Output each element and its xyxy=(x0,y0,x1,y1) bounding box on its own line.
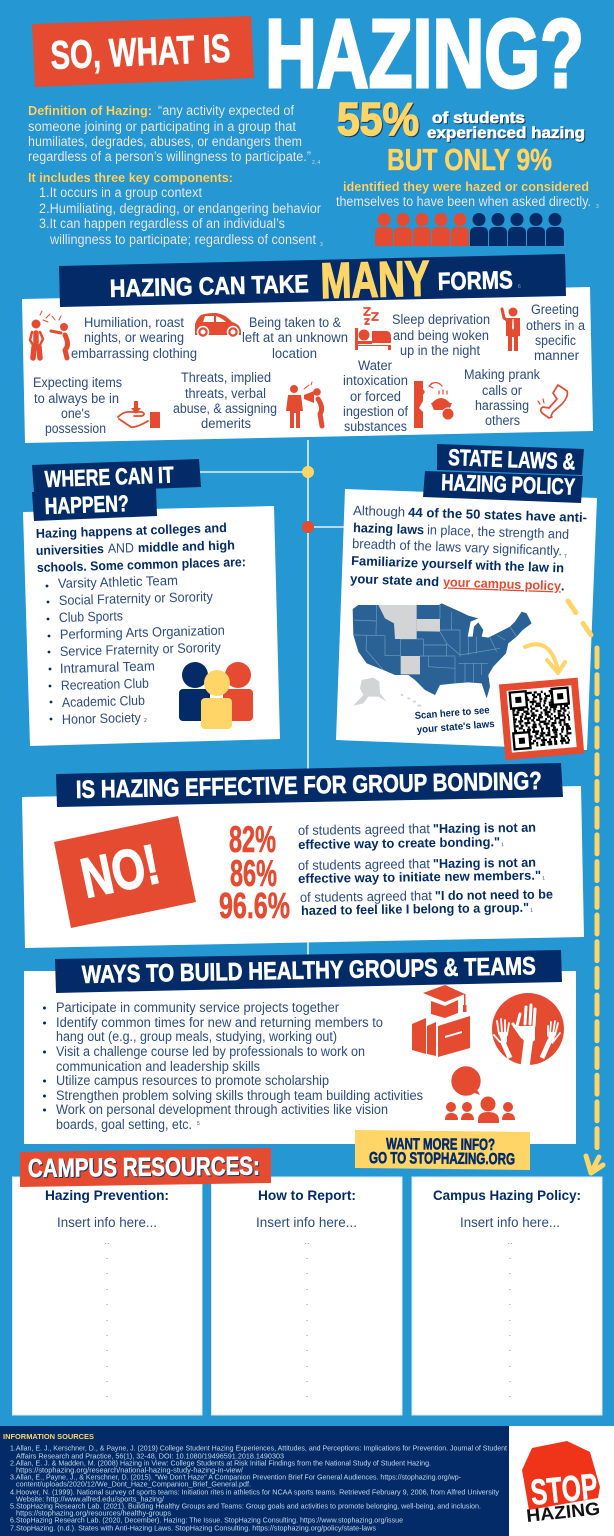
list of ways: Participate in community service projects together xyxy=(56,1000,339,1015)
panel: hazing prevention: .. xyxy=(104,1236,110,1246)
panel: how to report: . xyxy=(306,1266,308,1276)
icon: car xyxy=(195,313,241,338)
logo: stop hazing: HAZING xyxy=(525,1498,601,1526)
body text: state laws: Familiarize yourself with the law in xyxy=(351,553,564,575)
body text: state laws: your campus policy xyxy=(443,574,562,593)
intro text: middle and high xyxy=(138,537,235,555)
banner heading: hazing can take many forms: 6 xyxy=(518,284,521,290)
footer: information sources: Affairs Research and Practice, 56(1), 32-48, DOI: 10.1080/19496591.2018.1490303 xyxy=(16,1454,284,1460)
list of ways: 5 xyxy=(197,1121,200,1127)
statistic: but only 9% xyxy=(336,142,599,210)
footer: information sources: 2.Allan, E. J. & Madden, M. (2008) Hazing in View: College Students at Risk Initial Findings from the National Study of Student Hazing. xyxy=(10,1460,431,1468)
icon: raised hands in circle xyxy=(492,993,564,1067)
icon: graduation cap on books xyxy=(412,985,470,1057)
panel: is hazing effective xyxy=(22,763,584,948)
list of ways: Identify common times for new and returning members to xyxy=(56,1015,383,1030)
statistic: 55% experienced hazing: experienced hazing xyxy=(427,125,585,142)
panel: campus hazing policy: Campus Hazing Policy: xyxy=(433,1187,581,1203)
item: threats: abuse, & assigning xyxy=(173,401,277,416)
statistic: 55% experienced hazing xyxy=(337,93,585,145)
item: humiliation xyxy=(71,315,197,361)
footer: information sources: 5.StopHazing Research Lab. (2021). Building Healthy Groups and Teams: Group goals and activities to promote belonging, well-being, and inclusion. xyxy=(10,1504,481,1510)
panel: hazing prevention: . xyxy=(106,1266,108,1276)
footer: information sources: INFORMATION SOURCES xyxy=(3,1434,94,1441)
three key components list xyxy=(28,170,323,248)
footer: information sources: content/uploads/2020/12/We_Dont_Haze_Companion_Brief_General.pdf. xyxy=(16,1482,251,1488)
footer: information sources: https://stophazing.org/research/national-hazing-study-hazing-in-view/ xyxy=(16,1468,243,1474)
stat: 86%: 86% xyxy=(230,853,277,894)
panel: how to report: . xyxy=(306,1359,308,1369)
stat: 96.6%: 96.6% xyxy=(219,885,290,926)
item: expecting items: one's xyxy=(61,406,90,421)
panel: hazing prevention: Insert info here... xyxy=(57,1215,157,1230)
intro text: Hazing happens at colleges and xyxy=(36,520,227,541)
icon: three people group xyxy=(179,662,253,729)
item: being taken: left at an unknown xyxy=(242,330,348,345)
footer: information sources xyxy=(0,1426,509,1536)
title: so, what is hazing xyxy=(32,0,584,108)
panel: how to report: .. xyxy=(304,1236,310,1246)
panel: hazing prevention: . xyxy=(106,1297,108,1307)
item: being taken xyxy=(242,315,348,361)
three key components list: 3.It can happen regardless of an individual’s xyxy=(39,216,285,231)
list of common places: Service Fraternity or Sorority xyxy=(60,640,221,659)
statistic: 55% experienced hazing: 55% xyxy=(337,93,419,145)
panel: how to report: How to Report: xyxy=(258,1187,356,1203)
three key components list: 2.Humiliating, degrading, or endangering behavior xyxy=(39,201,321,216)
three key components list: It includes three key components: xyxy=(28,170,233,185)
item: expecting items xyxy=(33,375,122,436)
definition of hazing text block: someone joining or participating in a group that xyxy=(28,119,296,134)
body text: state laws: in place, the strength and xyxy=(427,522,569,542)
panel: hazing prevention: . xyxy=(106,1389,108,1399)
list of ways: boards, goal setting, etc. xyxy=(56,1117,192,1132)
panel: hazing prevention: . xyxy=(106,1313,108,1323)
item: greeting others: Greeting xyxy=(531,302,579,317)
icon: bed and zzz xyxy=(355,308,391,350)
footer: information sources: 6.StopHazing Research Lab. (2020, December). Hazing: The Issue. StopHazing Consulting. https://www.stophazing.org/issue xyxy=(10,1518,403,1524)
item: expecting items: Expecting items xyxy=(33,375,122,390)
intro text: AND xyxy=(108,540,134,556)
stat: 96.6%: "I do not need to be xyxy=(435,886,553,903)
footer: information sources: 1.Allan, E. J., Kerschner, D., & Payne, J. (2019) College Student Hazing Experiences, Attitudes, and Perceptions: Implications for Prevention. Journal of Student xyxy=(10,1446,507,1452)
body text: state laws: your state and xyxy=(350,571,439,589)
panel: campus hazing policy: . xyxy=(509,1297,511,1307)
panel: hazing prevention: . xyxy=(106,1374,108,1384)
panel: campus hazing policy: .. xyxy=(507,1236,513,1246)
stat: 96.6%: of students agreed that xyxy=(300,888,432,905)
heading: campus resources: CAMPUS RESOURCES: xyxy=(28,1151,260,1183)
list of common places: 2 xyxy=(144,718,147,724)
panel: hazing prevention: . xyxy=(106,1251,108,1261)
icon: head, bowl of food and pill xyxy=(414,381,454,428)
item: sleep deprivation: Sleep deprivation xyxy=(392,312,490,327)
stat: 86%: 1 xyxy=(542,876,545,882)
logo: stop hazing xyxy=(509,1426,614,1536)
caption: scan here: Scan here to see xyxy=(414,705,490,722)
icon: two people arguing xyxy=(30,311,68,358)
item: being taken: Being taken to & xyxy=(249,315,341,330)
item: greeting others: others in a xyxy=(526,318,585,333)
title tag: so, what is: SO, WHAT IS xyxy=(50,27,231,78)
banner heading: hazing can take many forms: HAZING CAN TAKE xyxy=(109,270,309,303)
panel: campus hazing policy: . xyxy=(509,1328,511,1338)
item: greeting others: specific xyxy=(535,333,576,348)
qr finder squares xyxy=(510,688,572,749)
item: water intoxication: or forced xyxy=(350,389,401,404)
item: expecting items: possession xyxy=(45,421,106,436)
heading: state laws: STATE LAWS & xyxy=(448,444,576,474)
list of common places: Recreation Club xyxy=(61,676,149,693)
panel: hazing prevention: . xyxy=(106,1343,108,1353)
panel: campus hazing policy: Insert info here... xyxy=(460,1215,560,1230)
title tag: so, what is xyxy=(32,16,254,87)
icon: man waving xyxy=(502,308,520,351)
body text: state laws xyxy=(350,503,587,593)
definition of hazing text block: 2, 4 xyxy=(312,160,321,166)
list of common places: Academic Club xyxy=(62,693,145,710)
stat: 86%: of students agreed that xyxy=(298,856,430,873)
item: humiliation: embarrassing clothing xyxy=(71,346,197,361)
callout: no: NO! xyxy=(75,832,165,910)
callout: want more info: GO TO STOPHAZING.ORG xyxy=(369,1150,515,1168)
list of common places: Performing Arts Organization xyxy=(60,623,225,642)
footer: information sources: Website: http://www.alfred.edu/sports_hazing/ xyxy=(16,1496,164,1504)
icon: speech bubble over audience xyxy=(445,1066,515,1123)
stat: 86%: effective way to initiate new members." xyxy=(298,868,541,886)
panel: campus hazing policy: . xyxy=(509,1266,511,1276)
list of common places: Club Sports xyxy=(59,608,123,625)
panel: hazing prevention: . xyxy=(106,1282,108,1292)
stat: 82%: of students agreed that xyxy=(298,821,430,838)
callout: want more info: WANT MORE INFO? xyxy=(386,1136,495,1154)
stat: 96.6%: hazed to feel like I belong to a group." xyxy=(301,900,529,918)
item: prank calls: others xyxy=(485,413,520,428)
item: sleep deprivation: up in the night xyxy=(400,343,480,358)
stat: 82%: 1 xyxy=(501,842,504,848)
statistic: but only 9%: identified they were hazed or considered xyxy=(343,179,589,194)
panel: how to report xyxy=(212,1177,402,1415)
body text: state laws: 7 xyxy=(564,554,567,560)
panel: how to report: Insert info here... xyxy=(256,1215,357,1230)
item: water intoxication: ingestion of xyxy=(343,404,408,419)
intro text: schools. Some common places are: xyxy=(37,554,246,575)
item: threats xyxy=(173,370,277,431)
qr code in red frame xyxy=(499,678,584,760)
footer: information sources: 7.StopHazing. (n.d.). States with Anti-Hazing Laws. StopHazing Consulting. https://stophazing.org/policy/state-laws xyxy=(10,1526,376,1532)
timeline node: red xyxy=(302,521,314,533)
item: prank calls: calls or xyxy=(482,383,522,398)
footer: information sources: 4.Hoover, N. (1999). National survey of sports teams: Initiation rites in athletics for NCAA sports teams. Retrieved February 9, 2006, from Alfred University xyxy=(10,1490,500,1496)
panel: how to report: . xyxy=(306,1374,308,1384)
item: prank calls: Making prank xyxy=(464,367,540,382)
item: humiliation: Humiliation, roast xyxy=(84,315,184,330)
arrow: curved to qr code xyxy=(525,644,565,673)
three key components list: 3 xyxy=(320,242,323,248)
list of ways xyxy=(43,1000,423,1132)
stat: 86% xyxy=(230,853,545,894)
statistic: but only 9%: 3 xyxy=(596,204,599,210)
panel: campus hazing policy: . xyxy=(509,1374,511,1384)
panel: how to report: . xyxy=(306,1313,308,1323)
stat: 86%: "Hazing is not an xyxy=(433,855,536,871)
stat: 96.6%: 1 xyxy=(530,908,533,914)
three key components list: 1.It occurs in a group context xyxy=(39,185,202,200)
list of common places: Social Fraternity or Sorority xyxy=(59,589,213,608)
definition of hazing text block: humiliates, degrades, abuses, or endangers them xyxy=(28,134,302,149)
item: water intoxication: substances xyxy=(344,419,407,434)
panel: campus hazing policy: . xyxy=(509,1251,511,1261)
item: water intoxication: Water xyxy=(358,358,392,373)
list of ways: Work on personal development through activities like vision xyxy=(56,1102,388,1117)
item: expecting items: to always be in xyxy=(34,391,119,406)
panel: campus hazing policy: . xyxy=(509,1389,511,1399)
stat: 96.6% xyxy=(219,885,553,926)
body text: state laws: hazing laws xyxy=(353,520,424,537)
item: water intoxication xyxy=(343,358,408,434)
panel: hazing prevention: . xyxy=(106,1359,108,1369)
heading: where can it happen: HAPPEN? xyxy=(44,490,129,519)
body text: state laws: breadth of the laws vary significantly. xyxy=(352,536,562,558)
list of ways: Visit a challenge course led by professionals to work on xyxy=(56,1044,365,1059)
banner heading: hazing can take many forms xyxy=(59,250,566,309)
item: humiliation: nights, or wearing xyxy=(84,330,184,345)
body text: state laws: Although xyxy=(353,503,405,520)
list of common places: Intramural Team xyxy=(60,659,155,676)
footer: information sources: https://stophazing.org/resources/healthy-groups xyxy=(16,1510,172,1518)
heading: where can it happen xyxy=(32,459,201,521)
item: threats: threats, verbal xyxy=(185,386,266,401)
list of common places: Honor Society xyxy=(62,710,141,727)
item: threats: demerits xyxy=(201,416,251,431)
body text: state laws: 44 of the 50 states have anti- xyxy=(408,505,587,525)
stat: 82%: "Hazing is not an xyxy=(433,820,536,836)
panel: many forms xyxy=(22,250,593,443)
panel: how to report: . xyxy=(306,1389,308,1399)
panel: how to report: . xyxy=(306,1297,308,1307)
item: sleep deprivation xyxy=(392,312,490,358)
list of common places xyxy=(46,573,225,727)
icon: hand with down arrow xyxy=(118,401,160,428)
dashed arrow: from campus policy to resources xyxy=(568,601,603,1173)
heading: where can it happen: WHERE CAN IT xyxy=(44,462,174,492)
callout: want more info xyxy=(355,1130,530,1170)
heading: state laws xyxy=(423,444,584,503)
icon: telephone handset xyxy=(538,385,567,418)
stat: 82% xyxy=(229,819,536,860)
panel: how to report: . xyxy=(306,1251,308,1261)
list of common places: Varsity Athletic Team xyxy=(58,573,178,591)
panel: hazing prevention: . xyxy=(106,1328,108,1338)
statistic: 55% experienced hazing: of students xyxy=(432,110,525,127)
caption: scan here xyxy=(414,705,495,736)
three key components list: willingness to participate; regardless of consent xyxy=(49,232,316,247)
definition of hazing text block: Definition of Hazing: xyxy=(28,103,152,118)
panel: how to report: . xyxy=(306,1328,308,1338)
definition of hazing text block: regardless of a person’s willingness to participate.” xyxy=(28,149,311,164)
panel: hazing prevention xyxy=(12,1177,202,1415)
item: water intoxication: intoxication xyxy=(343,373,408,388)
body text: state laws: . xyxy=(561,578,565,593)
list of ways: Strengthen problem solving skills through team building activities xyxy=(56,1088,423,1103)
panel: how to report: . xyxy=(306,1282,308,1292)
panel: where can it happen xyxy=(23,459,280,746)
stat: 82%: effective way to create bonding." xyxy=(298,834,500,852)
item: greeting others xyxy=(526,302,585,363)
list of ways: hang out (e.g., group meals, studying, working out) xyxy=(56,1029,337,1044)
footer: information sources: 3.Allan, E., Payne, J., & Kerschner, D. (2015). "We Don't Haze" A Companion Prevention Brief For General Audiences. https://stophazing.org/wp- xyxy=(10,1474,462,1482)
map: states with anti-hazing laws xyxy=(353,603,532,706)
stat: 82%: 82% xyxy=(229,819,276,860)
item: prank calls: harassing xyxy=(475,398,529,413)
item: being taken: location xyxy=(272,346,317,361)
banner heading: hazing can take many forms: FORMS xyxy=(437,266,513,296)
banner heading: hazing can take many forms: MANY xyxy=(320,250,430,309)
callout: no xyxy=(54,816,196,928)
panel: campus hazing policy: . xyxy=(509,1343,511,1353)
definition of hazing text block xyxy=(28,103,321,166)
item: prank calls xyxy=(464,367,540,428)
panel: ways to build healthy groups xyxy=(24,950,576,1144)
item: sleep deprivation: and being woken xyxy=(393,328,489,343)
panel: hazing prevention: Hazing Prevention: xyxy=(45,1187,169,1203)
pictogram: ten people, 5.5 in red xyxy=(375,213,564,246)
caption: scan here: your state's laws xyxy=(416,719,495,736)
definition of hazing text block: “any activity expected of xyxy=(158,103,294,118)
list of ways: communication and leadership skills xyxy=(56,1059,260,1074)
icon: person shouting through megaphone xyxy=(286,382,322,428)
statistic: but only 9%: BUT ONLY 9% xyxy=(387,142,552,177)
list of ways: Utilize campus resources to promote scholarship xyxy=(56,1073,329,1088)
panel: how to report: . xyxy=(306,1343,308,1353)
item: greeting others: manner xyxy=(534,348,579,363)
panel: campus hazing policy: . xyxy=(509,1313,511,1323)
timeline node: yellow xyxy=(302,466,314,478)
panel: campus hazing policy xyxy=(412,1177,602,1415)
panel: campus hazing policy: . xyxy=(509,1282,511,1292)
statistic: but only 9%: themselves to have been when asked directly. xyxy=(336,194,591,209)
intro text xyxy=(36,520,246,575)
panel: state laws and hazing policy xyxy=(336,444,597,760)
item: threats: Threats, implied xyxy=(181,370,271,385)
intro text: universities xyxy=(36,541,104,558)
panel: campus hazing policy: . xyxy=(509,1359,511,1369)
